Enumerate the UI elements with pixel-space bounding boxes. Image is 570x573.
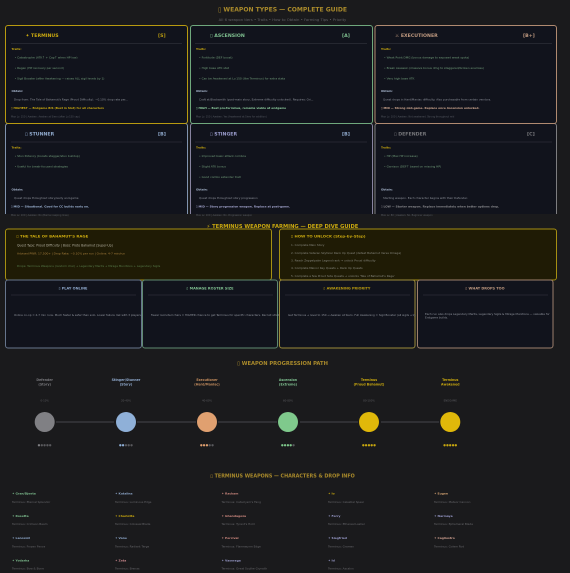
- panel: terminus: Max Lv. 150 | Awaken: Awaken at Siero (after Lv.150 cap): [11, 116, 80, 118]
- character list: ✦ Cagliostro: [434, 536, 455, 540]
- panel: terminus: [S]: [158, 33, 166, 39]
- section heading: characters: ▯ TERMINUS WEAPONS — CHARACTERS & DROP INFO: [210, 474, 355, 480]
- stage: stinger/stunner: ●●●●●: [119, 443, 133, 447]
- character list: Terminus: Flamewyrm Edge: [220, 544, 261, 548]
- panel: ascension: Traits:: [196, 47, 206, 51]
- panel: tale of bahamut's rage: Quest Type: Proud Difficulty | Boss: Proto Bahamut (Super-Up): [17, 244, 113, 248]
- subtitle: All 6 weapon tiers • Traits • How to Obtain • Farming Tips • Priority: [219, 17, 347, 22]
- panel: how to unlock: 2. Complete Veteran Skyfarer Rank Up Quest (defeat Bahamut Versa Omega): [291, 251, 401, 255]
- character list: Terminus: Frozen Fence: [11, 544, 45, 548]
- panel: how to unlock: 5. Complete a few Proud Side Quests → unlocks 'Tale of Bahamut's Rage': [291, 274, 395, 278]
- character list: ✦ Lancelot: [12, 536, 31, 540]
- character list: ✦ Ghandagoza: [222, 514, 246, 518]
- character list: ✦ Rosetta: [12, 514, 29, 518]
- panel: stinger: • Good combo extender trait: [199, 175, 242, 179]
- panel: how to unlock: 1. Complete Main Story: [291, 243, 325, 247]
- panel: ascension: Max Lv. 150 | Awaken: Yes (Awakened at Siero for addition): [196, 116, 267, 118]
- panel: defender: • Garrison (DEF↑ based on missing HP): [384, 165, 441, 169]
- character list: Terminus: Colossal Blade: [114, 522, 151, 526]
- panel: play online: [6, 280, 142, 348]
- character list: ✦ Yodarha: [12, 558, 29, 562]
- panel: terminus: ✦ TERMINUS: [26, 33, 59, 39]
- panel: terminus: Obtain:: [12, 89, 23, 93]
- stage: ascension: (Extreme): [279, 382, 297, 386]
- panel: executioner: • Very high base ATK: [384, 76, 415, 80]
- character list: ✦ Siegfried: [328, 536, 347, 540]
- panel: defender: [C]: [527, 132, 535, 138]
- panel: stunner: ▯ STUNNER: [25, 132, 55, 138]
- panel: stunner: • Useful for break-focused strategies: [14, 165, 68, 169]
- panel: how to unlock: 3. Reach Zeppelpalm Legend rank → unlock Proud difficulty: [291, 259, 376, 263]
- panel: executioner: Max Lv. 100 | Awaken: Not awakened. Strong throughout mid: [381, 116, 455, 118]
- panel: play online: Online co-op = 4-7 min runs. Much faster & safer than solo. Lower failure risk with 3 players.: [14, 313, 142, 317]
- character list: Terminus: Tyrant's Hold: [220, 522, 255, 526]
- panel: defender: Traits:: [381, 146, 391, 150]
- panel: stunner: ▯ MID — Situational. Good for CC builds early on.: [11, 204, 89, 208]
- stage: defender: (Story): [38, 382, 52, 386]
- stage: executioner: [194, 378, 220, 447]
- stage: executioner: (Hard/Maniac): [194, 382, 220, 386]
- stage: executioner: 40-60%: [202, 398, 213, 402]
- panel: what drops too: [418, 280, 553, 348]
- character list: Terminus: Gramen: [327, 544, 354, 548]
- character list: [11, 492, 473, 570]
- panel: stunner: Quest drops throughout story/early end-game: [14, 196, 79, 200]
- panel: terminus: ▯ HIGHEST — Endgame BiS (Best in Slot) for all characters: [11, 106, 104, 110]
- panel: executioner: ▯ MID — Strong mid-game. Replace once Ascension unlocked.: [381, 106, 479, 110]
- character list: Terminus: Radiant Terge: [114, 544, 149, 548]
- character list: ✦ Gran/Djeeta: [12, 492, 36, 496]
- panel: terminus: • Catastrophe (ATK↑ + Cap↑ when HP low): [14, 55, 78, 59]
- panel: defender: ▯ LOW — Starter weapon. Replace immediately when better options drop.: [381, 204, 499, 208]
- section heading: progression: ▯ WEAPON PROGRESSION PATH: [237, 361, 328, 367]
- stage: terminus proud: 80-100%: [363, 398, 375, 402]
- panel: what drops too: ▯ WHAT DROPS TOO: [465, 286, 505, 290]
- stage: ascension: ●●●●●: [281, 443, 295, 447]
- character list: ✦ Zeta: [115, 558, 126, 562]
- stage: terminus awakened: ENDGAME: [444, 398, 457, 402]
- panel: stunner: [B]: [158, 132, 166, 138]
- stage: ascension: Ascension: [279, 378, 298, 382]
- panel: tale of bahamut's rage: Drops: Terminus Weapons (random char) + Legendary Merits + Mirage Munitions + Legendary Sigils: [17, 264, 161, 268]
- panel: executioner: ⚔ EXECUTIONER: [395, 33, 438, 39]
- panel: stunner: Max Lv. 100 | Awaken: No (Barrier-reaping lines): [11, 214, 69, 217]
- panel: stinger: ▯ STINGER: [210, 132, 238, 138]
- character list: Terminus: Great Scythe Grynoth: [220, 566, 267, 570]
- character list: Terminus: Ascalon: [327, 566, 354, 570]
- panel: how to unlock: 4. Complete Mainor Key Quests + Rank Up Quests: [291, 266, 363, 270]
- character list: Terminus: Bow & Bone: [11, 566, 44, 570]
- panel: stinger: • Slight ATK bonus: [199, 165, 226, 169]
- panel: executioner: • Break Assassin (massive bonus dmg to staggered/broken enemies): [384, 66, 484, 70]
- character list: Terminus: Ethereal Lasher: [327, 522, 366, 526]
- stage: stinger/stunner: Stinger/Stunner: [112, 378, 141, 382]
- character list: Terminus: Eternal Splendor: [11, 500, 51, 504]
- panel: stinger: • Improved basic attack combos: [199, 154, 246, 158]
- stage: terminus awakened: ●●●●●: [443, 443, 458, 447]
- character list: Terminus: Luminous Edge: [114, 500, 152, 504]
- stage: terminus proud: [354, 378, 385, 447]
- character list: ✦ Vane: [115, 536, 127, 540]
- character list: ✦ Id: [328, 558, 335, 562]
- character list: ✦ Charlotta: [115, 514, 134, 518]
- panel: defender: [375, 124, 556, 217]
- stage: terminus awakened: Awakened: [441, 382, 460, 386]
- panel: ascension: • Can be Awakened at Lv.150 (like Terminus) for extra stats: [199, 76, 286, 80]
- character list: Terminus: Celestial Spear: [327, 500, 365, 504]
- panel: how to unlock: [280, 229, 556, 280]
- character list: ✦ Percival: [222, 536, 239, 540]
- panel: executioner: • Weak Point DMG (bonus damage to exposed weak spots): [384, 55, 469, 59]
- stage: executioner: ●●●●●: [200, 443, 214, 447]
- panel: awakening priority: Get Terminus → level to 150 → Awaken at Siero. Full Awakening = Sigil Booster (all sigils +1).: [288, 313, 416, 317]
- panel: stunner: • Stun Potency (boosts stagger/stun buildup): [14, 154, 80, 158]
- character list: Terminus: Meteor Cannon: [433, 500, 471, 504]
- panel: ascension: Obtain:: [196, 89, 208, 93]
- panel: stinger: Traits:: [196, 146, 206, 150]
- panel: ascension: ▯ ASCENSION: [210, 33, 245, 39]
- panel: tale of bahamut's rage: ▯ THE TALE OF BAHAMUT'S RAGE: [16, 234, 89, 238]
- character list: ✦ Eugen: [434, 492, 448, 496]
- stage: defender: 0-10%: [41, 398, 49, 402]
- character list: Terminus: Golem Rod: [433, 544, 464, 548]
- panel: how to unlock: ▯ HOW TO UNLOCK (Step-by-Step): [291, 234, 366, 238]
- panel: manage roster size: [142, 280, 290, 348]
- stage: terminus awakened: Terminus: [442, 378, 459, 382]
- stage: defender: Defender: [36, 378, 53, 382]
- panel: stunner: Traits:: [12, 146, 21, 150]
- panel: defender: ▯ DEFENDER: [394, 132, 427, 138]
- panel: executioner: Traits:: [381, 47, 391, 51]
- stage: ascension: [278, 378, 298, 447]
- panel: stinger: Obtain:: [196, 188, 208, 192]
- character list: ✦ Narmaya: [434, 514, 453, 518]
- section heading: farming: ⚡ TERMINUS WEAPON FARMING — DEEP DIVE GUIDE: [207, 224, 359, 230]
- panel: terminus: • Regen (HP recovery per second): [14, 66, 64, 70]
- stage: stinger/stunner: 20-40%: [121, 398, 132, 402]
- panel: awakening priority: ▯ AWAKENING PRIORITY: [324, 286, 371, 290]
- character list: ✦ Io: [328, 492, 335, 496]
- stage: defender: ●●●●●: [38, 443, 52, 447]
- stage: terminus proud: (Proud Bahamut): [354, 382, 385, 386]
- stage: defender: [35, 378, 55, 447]
- panel: executioner: Obtain:: [381, 89, 393, 93]
- stage: terminus proud: ●●●●●: [362, 443, 376, 447]
- stage: stinger/stunner: (Story): [120, 382, 133, 386]
- panel: stinger: [190, 124, 372, 217]
- panel: terminus: • Sigil Booster (after Awakening — raises ALL sigil levels by 1): [14, 76, 104, 80]
- character list: ✦ Katalina: [115, 492, 133, 496]
- character list: ✦ Ferry: [328, 514, 340, 518]
- panel: tale of bahamut's rage: [6, 229, 272, 280]
- stage: terminus proud: Terminus: [361, 378, 377, 382]
- panel: manage roster size: Fewer recruited chars = HIGHER chance to get Terminus for specific characters. Recruit strategically.: [151, 313, 290, 317]
- panel: stinger: Max Lv. 100 | Awaken: No. Progression weapon: [196, 214, 253, 217]
- character list: Terminus: Cataclysm's Fang: [220, 500, 261, 504]
- panel: stinger: Quest drops throughout story progression: [199, 196, 258, 200]
- progression chart: [35, 378, 460, 447]
- panel: stunner: Obtain:: [12, 188, 23, 192]
- panel: stinger: ▯ MID — Story progression weapon. Replace at post-game.: [196, 204, 290, 208]
- title: ▯ WEAPON TYPES — COMPLETE GUIDE: [218, 7, 347, 14]
- panel: play online: ▯ PLAY ONLINE: [59, 286, 88, 290]
- character list: Terminus: Crimson Beam: [11, 522, 48, 526]
- panel: stunner: [6, 124, 188, 217]
- panel: ascension: ▯ HIGH — Best pre-Terminus, remains viable at endgame: [196, 106, 286, 110]
- stage: stinger/stunner: [112, 378, 141, 447]
- stage: terminus awakened: [440, 378, 460, 447]
- panel: executioner: Quest drops in Hard/Maniac difficulty. Also purchasable from certain vendors.: [383, 98, 491, 102]
- panel: awakening priority: [280, 280, 416, 348]
- panel: what drops too: Each run also drops Legendary Merits, Legendary Sigils & Mirage Munitions — valuable for: [425, 312, 551, 316]
- panel: defender: • HP (Max HP increase): [384, 154, 418, 158]
- panel: terminus: Traits:: [12, 47, 21, 51]
- panel: ascension: • High base ATK stat: [199, 66, 230, 70]
- panel: defender: Obtain:: [381, 188, 393, 192]
- character list: Terminus: Ephemeral Blade: [433, 522, 473, 526]
- panel: ascension: [190, 26, 372, 124]
- panel: ascension: Craft at Blacksmith (post-main story, Extreme difficulty unlocked). Requires: Ori...: [199, 98, 314, 102]
- stage: ascension: 60-80%: [283, 398, 294, 402]
- panel: executioner: [B+]: [523, 33, 535, 39]
- panel: defender: Max Lv. 80 | Awaken: No. Beginner weapon: [381, 214, 433, 217]
- panel: manage roster size: ▯ MANAGE ROSTER SIZE: [186, 286, 234, 290]
- panel: defender: Starting weapon. Each character begins with their Defender.: [383, 196, 468, 200]
- panel: what drops too: Endgame builds.: [425, 315, 448, 319]
- panel: ascension: [A]: [342, 33, 350, 39]
- panel: executioner: [375, 26, 556, 124]
- panel: terminus: Drop from: The Tale of Bahamut's Rage (Proud Difficulty). ~0.10% drop rate per...: [14, 98, 128, 102]
- character list: ✦ Rackam: [222, 492, 238, 496]
- panel: terminus: [6, 26, 188, 124]
- character list: Terminus: Brenas: [114, 566, 140, 570]
- character list: ✦ Vaseraga: [222, 558, 241, 562]
- panel: tale of bahamut's rage: Advised PWR: 17,500+ | Drop Rate: ~0.10% per run | Online: 4-7 min/run: [17, 252, 125, 256]
- panel: ascension: • Fortitude (DEF boost): [199, 55, 232, 59]
- panel: stinger: [B]: [342, 132, 350, 138]
- stage: executioner: Executioner: [196, 378, 218, 382]
